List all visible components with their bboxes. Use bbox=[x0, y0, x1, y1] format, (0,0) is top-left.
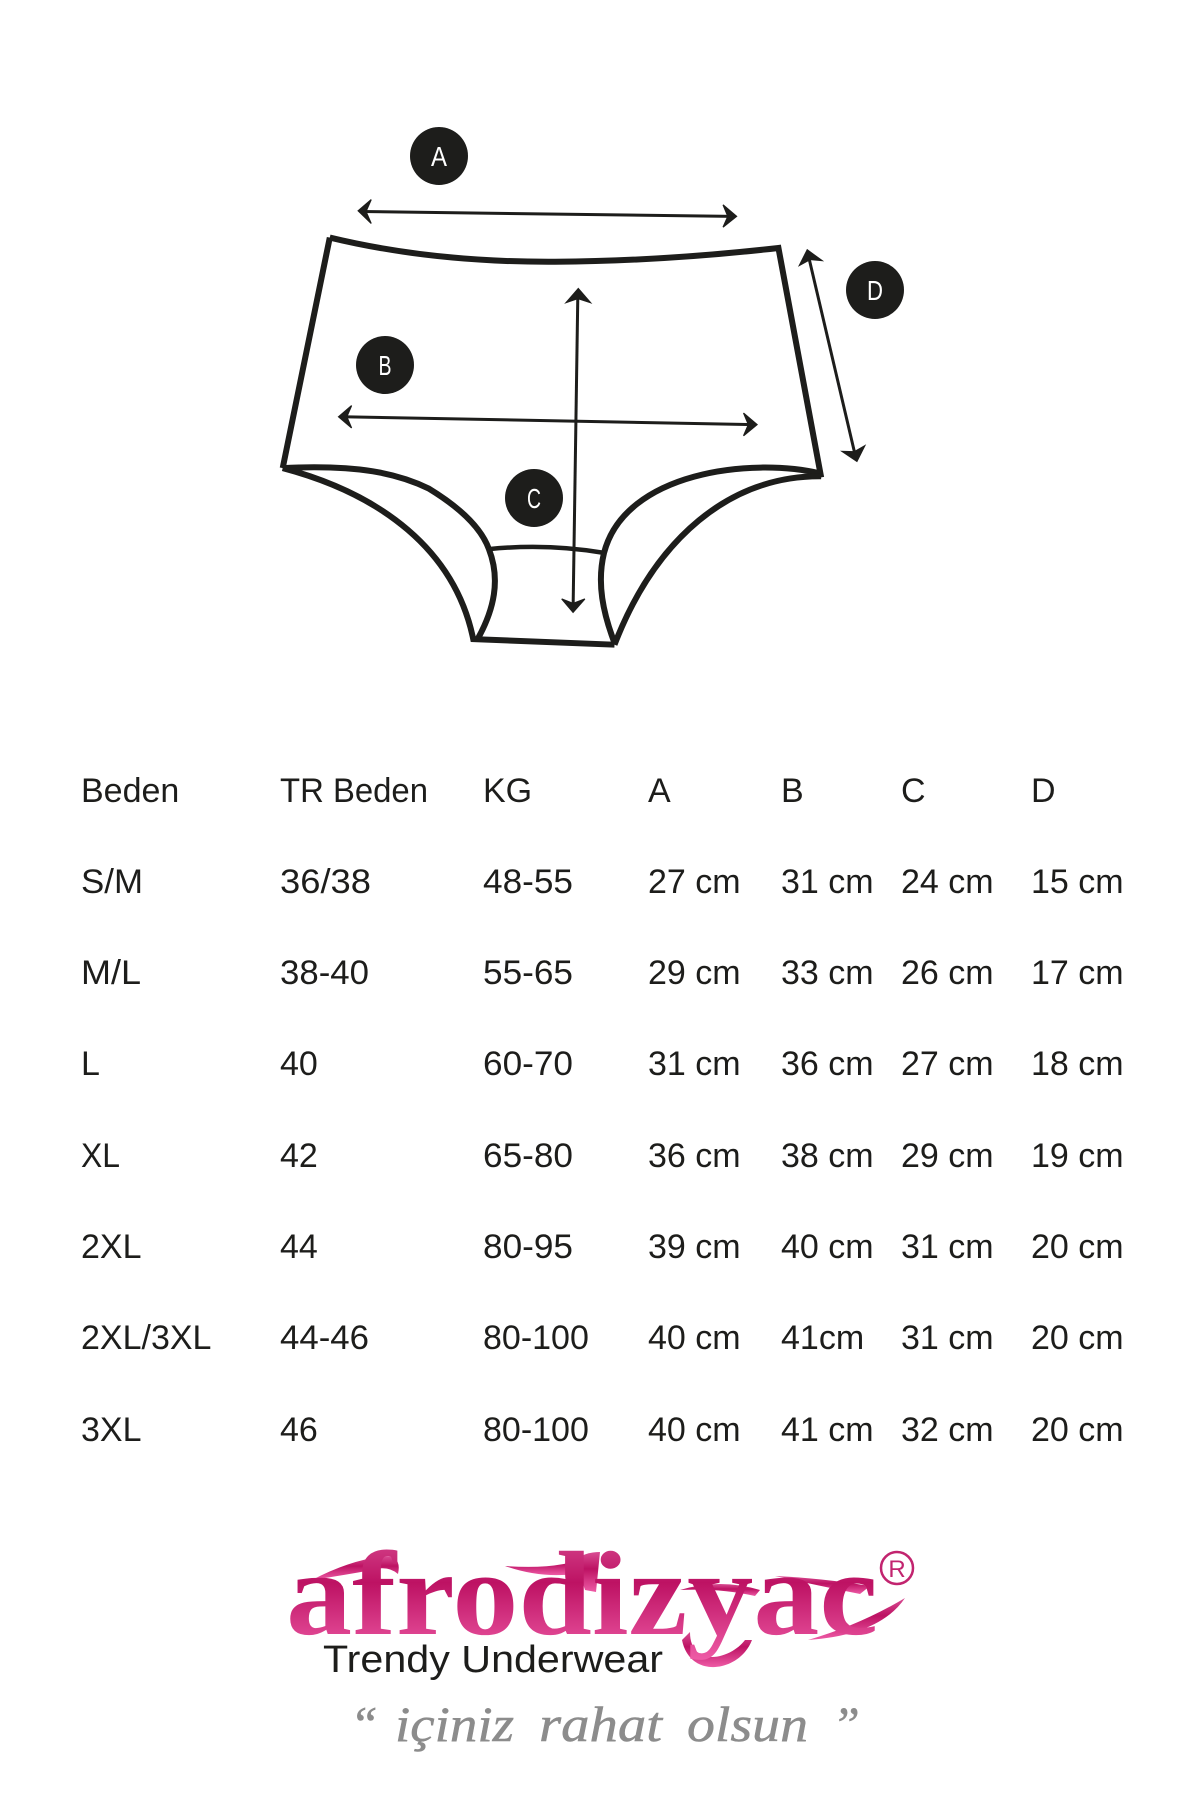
row L: 60-70 bbox=[483, 1045, 573, 1083]
row XL: XL bbox=[81, 1137, 120, 1175]
badge A: A bbox=[431, 141, 447, 172]
row 3XL: 40 cm bbox=[648, 1411, 741, 1449]
row 3XL: 3XL bbox=[81, 1411, 142, 1449]
row L bbox=[81, 1045, 1124, 1083]
badge D bbox=[846, 261, 904, 319]
row 2XL: 2XL bbox=[81, 1228, 142, 1266]
row XL: 65-80 bbox=[483, 1137, 573, 1175]
arrow A bbox=[358, 200, 737, 227]
row 2XL: 31 cm bbox=[901, 1228, 994, 1266]
slogan: olsun bbox=[687, 1696, 808, 1752]
badge B bbox=[356, 336, 414, 394]
row 2XL/3XL: 80-100 bbox=[483, 1319, 589, 1357]
row M/L: 38-40 bbox=[280, 954, 369, 992]
row XL: 36 cm bbox=[648, 1137, 741, 1175]
row M/L: 26 cm bbox=[901, 954, 994, 992]
garment size diagram bbox=[283, 127, 904, 645]
row 3XL bbox=[81, 1411, 1124, 1449]
table header: D bbox=[1031, 772, 1056, 810]
row M/L: 33 cm bbox=[781, 954, 874, 992]
garment outline bbox=[283, 238, 821, 645]
row S/M: 27 cm bbox=[648, 863, 741, 901]
arrow B bbox=[339, 406, 757, 436]
row 2XL bbox=[81, 1228, 1124, 1266]
logo swashes bbox=[312, 1552, 905, 1667]
row 2XL/3XL: 40 cm bbox=[648, 1319, 741, 1357]
badge A bbox=[410, 127, 468, 185]
registered mark bbox=[881, 1552, 913, 1584]
row 2XL: 40 cm bbox=[781, 1228, 874, 1266]
row XL: 38 cm bbox=[781, 1137, 874, 1175]
row L: 40 bbox=[280, 1045, 318, 1083]
table header bbox=[81, 772, 1056, 810]
row L: 36 cm bbox=[781, 1045, 874, 1083]
row 2XL: 20 cm bbox=[1031, 1228, 1124, 1266]
row 2XL: 44 bbox=[280, 1228, 318, 1266]
slogan: içiniz bbox=[395, 1696, 514, 1752]
badge D: D bbox=[867, 275, 883, 306]
row M/L: 17 cm bbox=[1031, 954, 1124, 992]
row 3XL: 46 bbox=[280, 1411, 318, 1449]
size table bbox=[81, 772, 1124, 1449]
registered mark: R bbox=[888, 1556, 906, 1583]
row S/M: 31 cm bbox=[781, 863, 874, 901]
row S/M: S/M bbox=[81, 863, 143, 901]
row S/M bbox=[81, 863, 1124, 901]
slogan bbox=[350, 1696, 860, 1752]
row 2XL/3XL bbox=[81, 1319, 1124, 1357]
row XL: 42 bbox=[280, 1137, 318, 1175]
slogan: ” bbox=[832, 1696, 860, 1752]
row 3XL: 20 cm bbox=[1031, 1411, 1124, 1449]
logo subtitle: Trendy Underwear bbox=[323, 1639, 663, 1681]
row L: L bbox=[81, 1045, 100, 1083]
table header: C bbox=[901, 772, 926, 810]
row S/M: 24 cm bbox=[901, 863, 994, 901]
table header: Beden bbox=[81, 772, 179, 810]
logo wordmark: afrodizyac bbox=[286, 1527, 878, 1660]
row M/L: 29 cm bbox=[648, 954, 741, 992]
row 3XL: 80-100 bbox=[483, 1411, 589, 1449]
row XL: 19 cm bbox=[1031, 1137, 1124, 1175]
row 3XL: 41 cm bbox=[781, 1411, 874, 1449]
row M/L: 55-65 bbox=[483, 954, 573, 992]
arrow C bbox=[562, 289, 591, 612]
table header: B bbox=[781, 772, 804, 810]
row M/L: M/L bbox=[81, 954, 141, 992]
brand logo bbox=[286, 1527, 913, 1681]
row S/M: 36/38 bbox=[280, 863, 371, 901]
row 2XL/3XL: 31 cm bbox=[901, 1319, 994, 1357]
row XL bbox=[81, 1137, 1124, 1175]
row 2XL/3XL: 41cm bbox=[781, 1319, 864, 1357]
table header: A bbox=[648, 772, 671, 810]
row S/M: 48-55 bbox=[483, 863, 573, 901]
row XL: 29 cm bbox=[901, 1137, 994, 1175]
row 2XL/3XL: 2XL/3XL bbox=[81, 1319, 211, 1357]
row S/M: 15 cm bbox=[1031, 863, 1124, 901]
row 3XL: 32 cm bbox=[901, 1411, 994, 1449]
row 2XL: 80-95 bbox=[483, 1228, 573, 1266]
badge C bbox=[505, 469, 563, 527]
slogan: “ bbox=[350, 1696, 378, 1752]
arrow D bbox=[799, 250, 865, 461]
badge B: B bbox=[378, 350, 392, 381]
row L: 31 cm bbox=[648, 1045, 741, 1083]
row 2XL/3XL: 44-46 bbox=[280, 1319, 369, 1357]
row 2XL: 39 cm bbox=[648, 1228, 741, 1266]
slogan: rahat bbox=[539, 1696, 663, 1752]
table header: TR Beden bbox=[280, 772, 428, 810]
table header: KG bbox=[483, 772, 532, 810]
badge C: C bbox=[527, 483, 541, 514]
row M/L bbox=[81, 954, 1124, 992]
row L: 27 cm bbox=[901, 1045, 994, 1083]
row L: 18 cm bbox=[1031, 1045, 1124, 1083]
row 2XL/3XL: 20 cm bbox=[1031, 1319, 1124, 1357]
